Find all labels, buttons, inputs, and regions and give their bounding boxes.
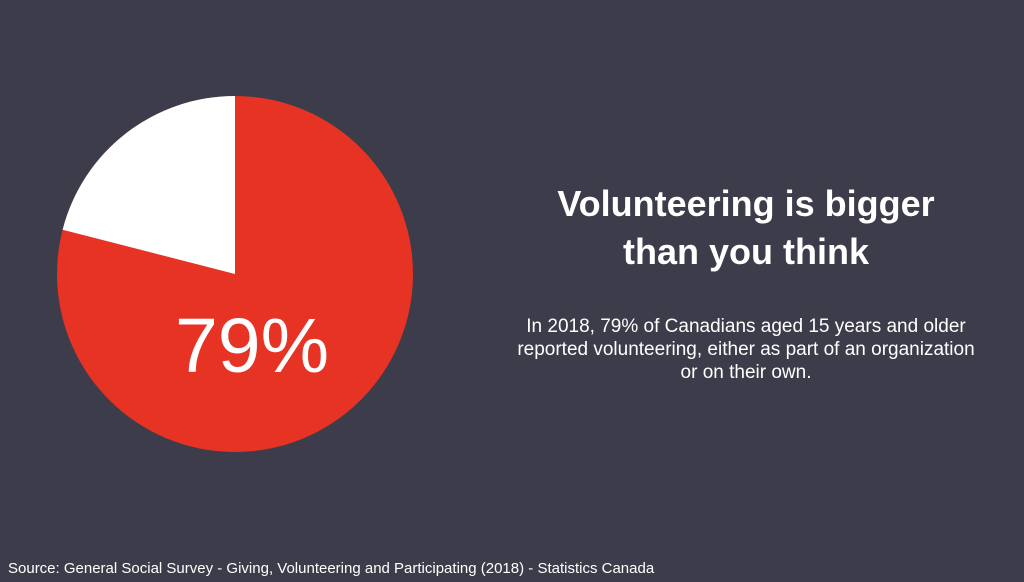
title: than you think [623,231,869,272]
source footnote: Source: General Social Survey - Giving, Volunteering and Participating (2018) - Statistics Canada [8,560,654,577]
description text: In 2018, 79% of Canadians aged 15 years and older [526,316,966,337]
description text: reported volunteering, either as part of an organization [517,339,975,360]
pie: red 79% slice [57,96,413,452]
title: Volunteering is bigger [557,183,935,224]
title [557,183,935,272]
pie: white 21% slice [63,96,235,274]
pie chart [57,96,413,452]
big percentage label: 79% [175,303,329,389]
description text: or on their own. [681,362,811,383]
description text [517,316,975,383]
